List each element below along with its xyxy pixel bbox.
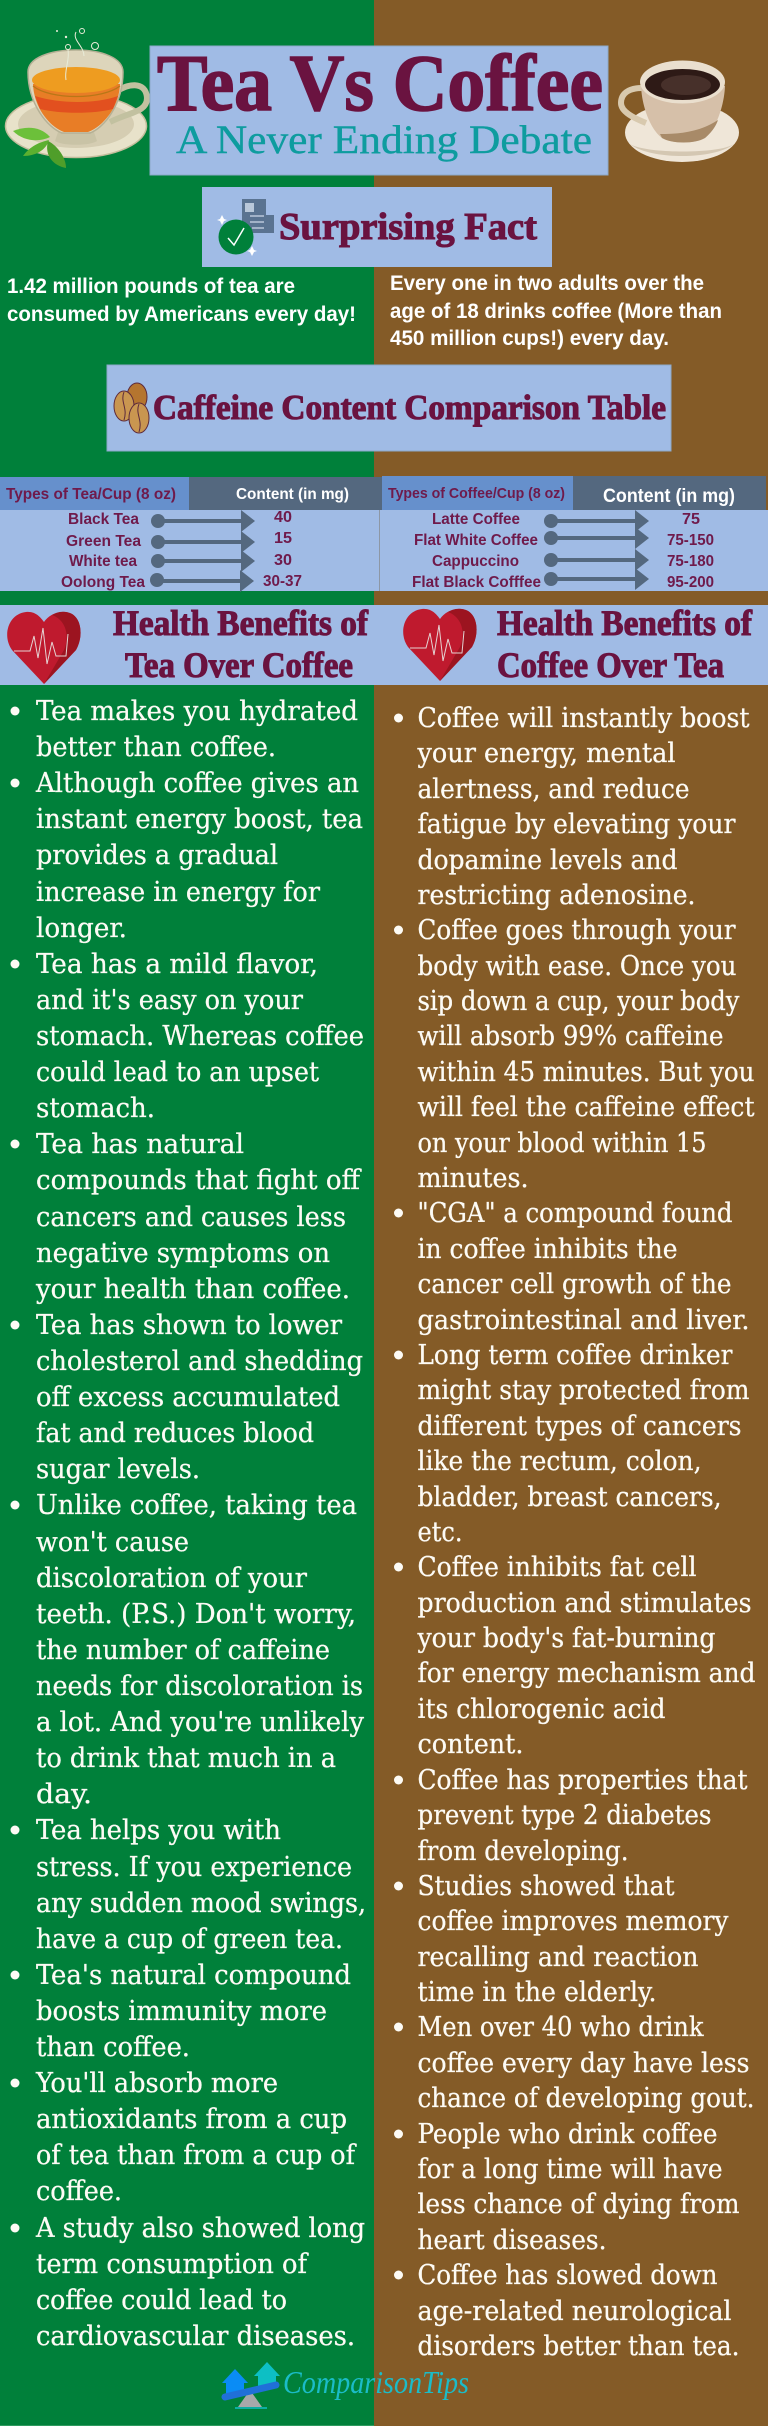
- bullet: memory: coffee improves memory: [418, 1906, 729, 1937]
- bullet: cholesterol: cholesterol and shedding: [36, 1346, 363, 1377]
- row: latte: [432, 510, 700, 532]
- row: flat white: [414, 527, 714, 549]
- panel: title box: [150, 40, 608, 175]
- bullet: cancer protection: bladder, breast cancers,: [418, 1482, 722, 1513]
- bullet: mild flavor: stomach. Whereas coffee: [36, 1021, 364, 1052]
- bullet: cancer protection: etc.: [418, 1517, 462, 1548]
- bullet: immunity: than coffee.: [36, 2032, 190, 2063]
- bullet: fat burning: content.: [418, 1729, 524, 1760]
- row: white tea: White tea: [69, 553, 137, 570]
- text block: coffee fact: 450 million cups!) every day.: [390, 327, 669, 350]
- bullet: cardiovascular: coffee could lead to: [36, 2285, 287, 2316]
- bullet: CGA: cancer cell growth of the: [418, 1269, 732, 1300]
- table header: [6, 486, 349, 503]
- bullet: energy boost: alertness, and reduce: [418, 774, 690, 805]
- panel: surprising fact heading: [202, 187, 552, 267]
- bullet: memory: time in the elderly.: [418, 1977, 656, 2008]
- bullet: heart disease: less chance of dying from: [418, 2189, 740, 2220]
- bullet: discoloration: day.: [36, 1779, 92, 1810]
- icon: coffee cup: [621, 60, 739, 162]
- bullet: hydration: better than coffee.: [36, 732, 276, 763]
- bullet: immunity: Tea's natural compound: [36, 1960, 351, 1991]
- icon: tea cup: [6, 28, 147, 168]
- panel: coffee background: [374, 0, 768, 2426]
- bullet: CGA: [394, 1198, 750, 1336]
- row: latte: Latte Coffee: [432, 511, 520, 528]
- bullet: discoloration: to drink that much in a: [36, 1743, 336, 1774]
- bullet: immunity: boosts immunity more: [36, 1996, 327, 2027]
- row: oolong tea: Oolong Tea: [61, 574, 145, 591]
- logo text: ComparisonTips: [283, 2364, 469, 2400]
- bullet: hydration: [10, 696, 358, 763]
- bullet: energy boost: [394, 703, 750, 911]
- bullet: discoloration: teeth. (P.S.) Don't worry,: [36, 1599, 356, 1630]
- bullet: mild flavor: [10, 949, 364, 1124]
- bullet: absorption: within 45 minutes. But you: [418, 1057, 754, 1088]
- bullet: memory: recalling and reaction: [418, 1942, 698, 1973]
- bullet: gout: Men over 40 who drink: [418, 2012, 704, 2043]
- bullet: neurological: age-related neurological: [418, 2296, 732, 2327]
- bullet: stress: Tea helps you with: [36, 1815, 281, 1846]
- bullet: gout: [394, 2012, 754, 2114]
- text block: tea fact: [7, 275, 356, 326]
- panel: tea background: [0, 0, 374, 2426]
- row: green tea: 15: [274, 530, 292, 547]
- bullet: discoloration: needs for discoloration is: [36, 1671, 363, 1702]
- heading: coffee benefits: [497, 603, 753, 685]
- bullet: discoloration: the number of caffeine: [36, 1635, 330, 1666]
- row: cappuccino: Cappuccino: [432, 553, 519, 570]
- bullet: CGA: in coffee inhibits the: [418, 1234, 678, 1265]
- bullet: cholesterol: sugar levels.: [36, 1454, 200, 1485]
- bullet: absorption: on your blood within 15: [418, 1128, 706, 1159]
- bullet: heart disease: People who drink coffee: [418, 2119, 718, 2150]
- bullet: natural compounds: [10, 1129, 362, 1305]
- heading: tea benefits: [113, 603, 369, 685]
- bullet: natural compounds: compounds that fight off: [36, 1165, 362, 1196]
- row: black tea: 40: [274, 509, 292, 526]
- row: white tea: [69, 550, 292, 572]
- row: flat white: 75-150: [667, 532, 714, 549]
- text block: coffee benefits list: [394, 703, 756, 2362]
- bullet: natural compounds: your health than coffee.: [35, 1274, 350, 1305]
- bullet: absorption: sip down a cup, your body: [418, 986, 740, 1017]
- bullet: fat burning: for energy mechanism and: [418, 1658, 756, 1689]
- bullet: fat burning: production and stimulates: [418, 1588, 752, 1619]
- bullet: mild flavor: stomach.: [36, 1093, 155, 1124]
- table header: Content (in mg): [603, 486, 735, 507]
- bullet: diabetes: from developing.: [418, 1836, 628, 1867]
- bullet: gout: coffee every day have less: [418, 2048, 750, 2079]
- bullet: diabetes: Coffee has properties that: [418, 1765, 748, 1796]
- row: flat black: [412, 568, 714, 591]
- bullet: cardiovascular: [10, 2213, 365, 2352]
- table: tea caffeine: [0, 477, 382, 592]
- row: flat black: 95-200: [667, 574, 714, 591]
- bullet: stress: stress. If you experience: [36, 1852, 352, 1883]
- bullet: discoloration: discoloration of your: [36, 1563, 307, 1594]
- bullet: discoloration: Unlike coffee, taking tea: [36, 1490, 357, 1521]
- row: black tea: Black Tea: [68, 511, 139, 528]
- bullet: gradual energy: increase in energy for: [36, 877, 320, 908]
- bullet: neurological: [394, 2260, 740, 2362]
- bullet: energy boost: restricting adenosine.: [418, 880, 696, 911]
- icon: heart coffee: [403, 609, 477, 681]
- row: green tea: Green Tea: [66, 533, 141, 550]
- row: oolong tea: 30-37: [263, 573, 302, 590]
- bullet: memory: Studies showed that: [418, 1871, 675, 1902]
- bullet: discoloration: won't cause: [36, 1527, 189, 1558]
- bullet: memory: [394, 1871, 729, 2008]
- bullet: gout: chance of developing gout.: [418, 2083, 754, 2114]
- icon: document with check: [217, 199, 274, 256]
- heading: Caffeine Content Comparison Table: [153, 388, 666, 427]
- bullet: absorption: minutes.: [418, 1163, 528, 1194]
- row: cappuccino: [432, 549, 714, 571]
- bullet: CGA: "CGA" a compound found: [418, 1198, 732, 1229]
- row: green tea: [66, 530, 292, 553]
- bullet: gradual energy: [10, 768, 363, 944]
- bullet: discoloration: [10, 1490, 364, 1810]
- bullet: absorption: will feel the caffeine effect: [418, 1092, 755, 1123]
- bullet: natural compounds: negative symptoms on: [36, 1238, 330, 1269]
- bullet: cancer protection: might stay protected from: [418, 1375, 750, 1406]
- bullet: cholesterol: off excess accumulated: [36, 1382, 340, 1413]
- bullet: cancer protection: [394, 1340, 750, 1548]
- table header: [388, 485, 735, 507]
- bullet: neurological: Coffee has slowed down: [418, 2260, 718, 2291]
- bullet: fat burning: Coffee inhibits fat cell: [418, 1552, 697, 1583]
- bullet: energy boost: dopamine levels and: [418, 845, 678, 876]
- bullet: neurological: disorders better than tea.: [418, 2331, 740, 2362]
- text block: tea fact: 1.42 million pounds of tea are: [7, 275, 295, 298]
- heading: tea benefits: Health Benefits of: [113, 603, 369, 643]
- text block: tea fact: consumed by Americans every day!: [7, 303, 356, 326]
- bullet: gradual energy: instant energy boost, tea: [36, 804, 363, 835]
- bullet: stress: any sudden mood swings,: [36, 1888, 366, 1919]
- bullet: gradual energy: provides a gradual: [36, 840, 278, 871]
- bullet: fat burning: its chlorogenic acid: [418, 1694, 666, 1725]
- bullet: immunity: [10, 1960, 351, 2063]
- panel: caffeine heading: [107, 365, 671, 451]
- table: coffee caffeine: [380, 476, 768, 591]
- bullet: hydration: Tea makes you hydrated: [36, 696, 358, 727]
- bullet: diabetes: prevent type 2 diabetes: [418, 1800, 712, 1831]
- bullet: mild flavor: Tea has a mild flavor,: [36, 949, 318, 980]
- heading: tea benefits: Tea Over Coffee: [125, 645, 353, 685]
- bullet: energy boost: your energy, mental: [416, 738, 676, 769]
- bullet: cholesterol: Tea has shown to lower: [36, 1310, 342, 1341]
- bullet: natural compounds: cancers and causes less: [36, 1202, 346, 1233]
- bullet: cardiovascular: A study also showed long: [35, 2213, 365, 2244]
- bullet: antioxidants: coffee.: [36, 2176, 122, 2207]
- bullet: diabetes: [394, 1765, 748, 1867]
- bullet: stress: have a cup of green tea.: [36, 1924, 343, 1955]
- bullet: mild flavor: could lead to an upset: [36, 1057, 319, 1088]
- bullet: antioxidants: You'll absorb more: [35, 2068, 278, 2099]
- panel: health benefits banner: [0, 603, 768, 685]
- bullet: antioxidants: of tea than from a cup of: [36, 2140, 357, 2171]
- bullet: cancer protection: Long term coffee drinker: [418, 1340, 733, 1371]
- bullet: natural compounds: Tea has natural: [36, 1129, 244, 1160]
- bullet: antioxidants: antioxidants from a cup: [36, 2104, 347, 2135]
- bullet: discoloration: a lot. And you're unlikely: [36, 1707, 364, 1738]
- bullet: absorption: body with ease. Once you: [418, 951, 736, 982]
- bullet: heart disease: for a long time will have: [418, 2154, 722, 2185]
- table header: Types of Tea/Cup (8 oz): [6, 486, 176, 503]
- bullet: absorption: Coffee goes through your: [418, 915, 736, 946]
- bullet: cancer protection: like the rectum, colon,: [418, 1446, 702, 1477]
- text block: coffee fact: age of 18 drinks coffee (More than: [390, 300, 722, 323]
- icon: coffee beans: [114, 383, 149, 433]
- bullet: cardiovascular: term consumption of: [36, 2249, 309, 2280]
- heading: coffee benefits: Health Benefits of: [497, 603, 753, 643]
- text block: coffee fact: Every one in two adults over the: [390, 272, 704, 295]
- bullet: stress: [10, 1815, 366, 1955]
- bullet: gradual energy: Although coffee gives an: [35, 768, 359, 799]
- row: flat black: Flat Black Cofffee: [412, 574, 541, 591]
- bullet: absorption: will absorb 99% caffeine: [418, 1021, 724, 1052]
- row: black tea: [68, 509, 292, 532]
- heading: coffee benefits: Coffee Over Tea: [497, 645, 724, 685]
- bullet: gradual energy: longer.: [36, 913, 127, 944]
- title: Tea Vs Coffee: [157, 40, 603, 128]
- bullet: cancer protection: different types of cancers: [418, 1411, 742, 1442]
- row: latte: 75: [682, 511, 700, 528]
- row: cappuccino: 75-180: [667, 553, 714, 570]
- bullet: energy boost: Coffee will instantly boost: [418, 703, 750, 734]
- row: oolong tea: [61, 570, 302, 592]
- bullet: heart disease: heart diseases.: [418, 2225, 606, 2256]
- subtitle: A Never Ending Debate: [176, 117, 592, 162]
- bullet: cholesterol: fat and reduces blood: [36, 1418, 314, 1449]
- bullet: fat burning: [394, 1552, 756, 1760]
- icon: seesaw with houses: [222, 2362, 280, 2408]
- bullet: CGA: gastrointestinal and liver.: [418, 1305, 750, 1336]
- text block: tea benefits list: [10, 696, 366, 2352]
- icon: heart tea: [7, 612, 81, 684]
- bullet: cardiovascular: cardiovascular diseases.: [36, 2321, 355, 2352]
- logo: ComparisonTips: [222, 2362, 469, 2408]
- table header: Types of Coffee/Cup (8 oz): [388, 485, 565, 502]
- bullet: energy boost: fatigue by elevating your: [418, 809, 736, 840]
- bullet: heart disease: [394, 2119, 740, 2256]
- text block: coffee fact: [390, 272, 722, 350]
- bullet: antioxidants: [10, 2068, 357, 2207]
- table header: Content (in mg): [236, 486, 349, 503]
- bullet: cholesterol: [10, 1310, 363, 1485]
- bullet: absorption: [394, 915, 755, 1194]
- row: flat white: Flat White Coffee: [414, 532, 538, 549]
- bullet: fat burning: your body's fat-burning: [416, 1623, 716, 1654]
- heading: Surprising Fact: [279, 206, 537, 248]
- row: white tea: 30: [274, 552, 292, 569]
- bullet: mild flavor: and it's easy on your: [36, 985, 303, 1016]
